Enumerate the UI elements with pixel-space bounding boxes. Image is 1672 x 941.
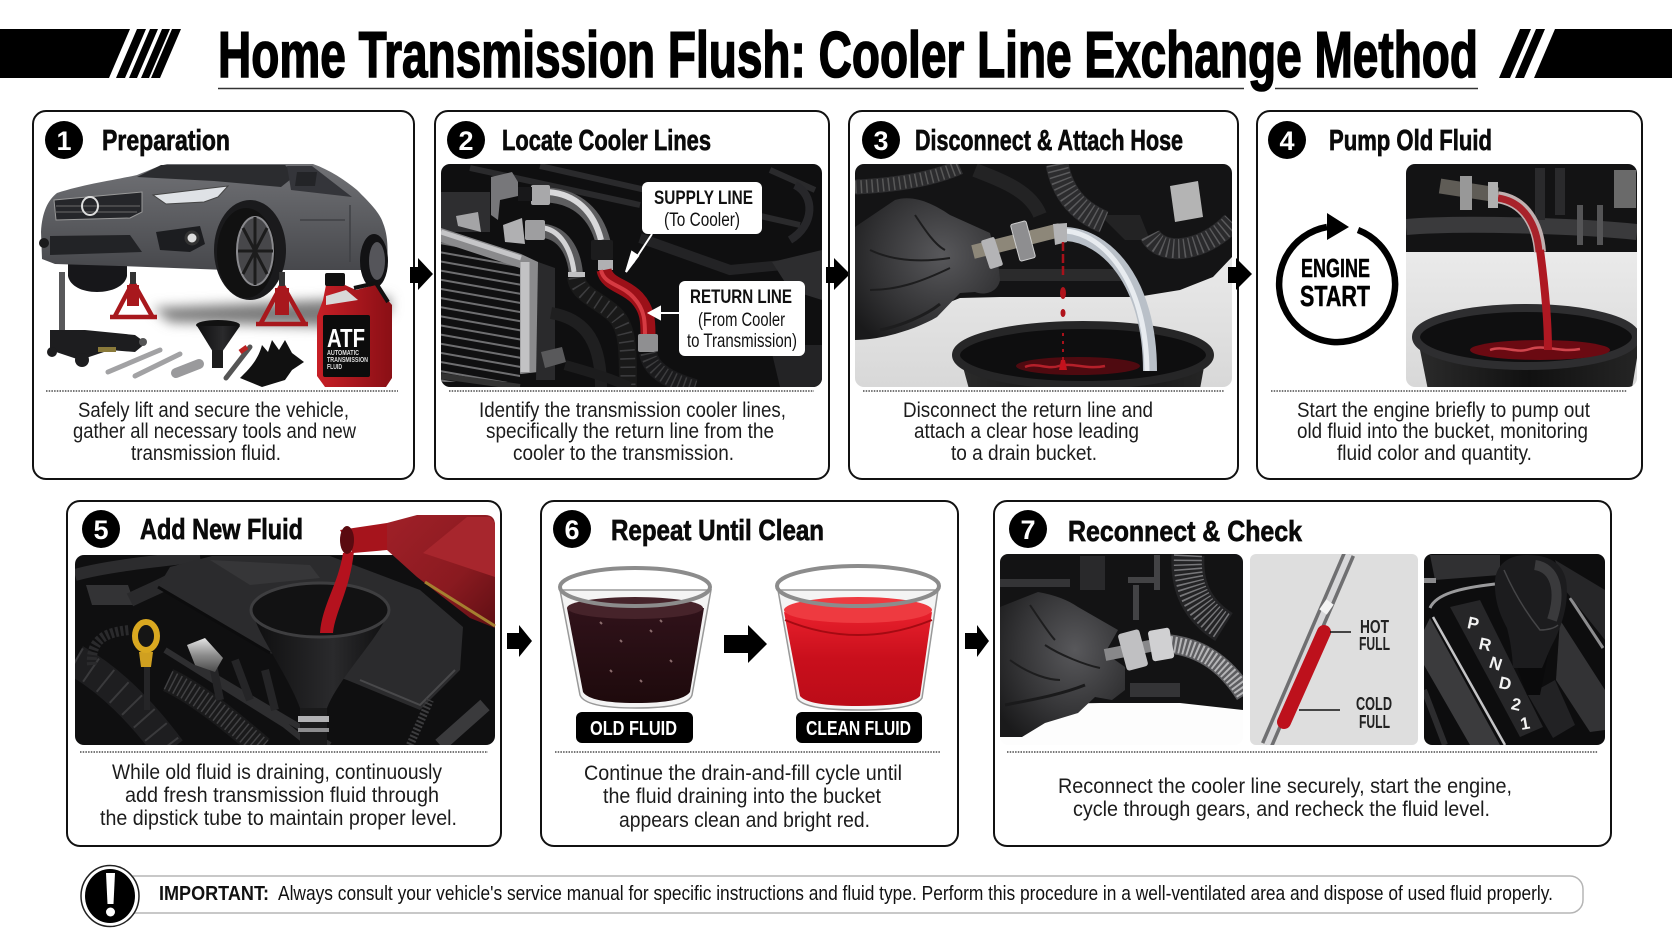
description: Reconnect the cooler line securely, start the engine, [1058, 775, 1512, 798]
left stripes [116, 29, 181, 78]
cold full mark [1299, 694, 1392, 732]
ATF jug: FLUID [327, 362, 342, 371]
fitting and clamps [973, 230, 1060, 252]
gear letters: 1 [1519, 713, 1531, 734]
description: Start the engine briefly to pump out [1297, 399, 1590, 422]
description [1297, 399, 1590, 465]
funnel [251, 583, 389, 745]
description: attach a clear hose leading [914, 420, 1139, 443]
bucket [964, 369, 1204, 387]
icon: engine start cycle arrow: START [1300, 281, 1370, 313]
step number 3 [862, 121, 900, 159]
gear letters: R [1477, 634, 1493, 655]
label: old fluid: OLD FLUID [590, 718, 677, 740]
step number 7: 7 [1020, 515, 1036, 545]
step number 2 [447, 121, 485, 159]
description: Identify the transmission cooler lines, [479, 399, 786, 422]
valve cover [158, 556, 463, 710]
supply hose collar [591, 240, 613, 260]
right stripes [1499, 29, 1545, 78]
panel: step 7 reconnect and check [994, 501, 1611, 846]
step number 7 [1009, 510, 1047, 548]
step number 1: 1 [56, 126, 72, 156]
ATF jug: ATF [327, 323, 365, 353]
description: gather all necessary tools and new [73, 420, 357, 443]
step number 5 [82, 510, 120, 548]
callout: supply line: SUPPLY LINE [654, 188, 753, 209]
bucket [1420, 346, 1637, 387]
cold full mark: FULL [1359, 712, 1390, 732]
heading: Preparation [102, 125, 230, 157]
label: clean fluid: CLEAN FLUID [806, 718, 911, 740]
panel: step 4 pump old fluid [1257, 111, 1642, 479]
description [903, 399, 1153, 465]
photo: gear selector [1424, 554, 1605, 745]
arrow 1 to 2 [410, 258, 433, 290]
silver supply pipe [548, 195, 603, 242]
photo: pouring fluid through funnel into engine [75, 515, 495, 750]
ATF jug [317, 273, 392, 387]
jack stands [110, 282, 308, 324]
silver sensor [187, 638, 223, 672]
arrow: return line pointer [649, 307, 679, 319]
red drips [1062, 242, 1064, 275]
description: transmission fluid. [131, 442, 281, 465]
icon: engine start cycle arrow [1279, 213, 1395, 342]
hot full mark [1330, 617, 1390, 654]
right black bar [1534, 29, 1672, 78]
step number 2: 2 [458, 126, 474, 156]
callout: supply line [642, 182, 762, 234]
description [73, 399, 357, 465]
glove [855, 198, 1000, 340]
arrow: old to clean [724, 625, 767, 663]
photo: gloved hand attaching clear hose over bucket [855, 164, 1232, 400]
left black bar [0, 29, 130, 78]
ATF jug: AUTOMATIC [327, 348, 359, 357]
illustration: cup of old fluid [560, 568, 711, 708]
description: the fluid draining into the bucket [603, 785, 881, 808]
icon: engine start cycle arrow: ENGINE [1301, 253, 1370, 283]
silver lower pipe [544, 231, 576, 274]
step number 6 [553, 510, 591, 548]
callout: return line: to Transmission) [687, 331, 797, 352]
bottle [340, 515, 495, 628]
title banner [0, 18, 1672, 91]
heading: Reconnect & Check [1068, 516, 1303, 548]
hot full mark: FULL [1359, 634, 1390, 654]
hoses [75, 660, 170, 750]
step number 1 [45, 121, 83, 159]
illustration: car on jack stands with tools and ATF jug [39, 164, 392, 387]
label: clean fluid [796, 712, 922, 743]
shift knob [1528, 688, 1542, 695]
fitting [1440, 186, 1498, 195]
description: to a drain bucket. [951, 442, 1097, 465]
panel: step 5 add new fluid [67, 501, 501, 846]
ATF jug: TRANSMISSION [327, 355, 368, 364]
photo: engine bay with cooler lines and radiator [441, 164, 822, 388]
wrenches and socket [108, 350, 199, 376]
panel: step 6 repeat until clean [541, 501, 958, 846]
photo: dipstick with hot and cold full marks [1250, 554, 1418, 745]
arrow: supply line pointer [626, 234, 652, 272]
description [584, 762, 902, 832]
arrow 3 to 4 [1228, 258, 1252, 290]
clear hose [1066, 234, 1150, 371]
hot full mark: HOT [1360, 617, 1389, 637]
floor jack [47, 272, 147, 367]
heading: Pump Old Fluid [1329, 125, 1492, 157]
heading: Add New Fluid [140, 514, 303, 546]
gear letters [1466, 613, 1531, 734]
description [100, 761, 457, 830]
hand [1000, 592, 1125, 737]
red return line [604, 270, 648, 336]
dipstick [144, 667, 150, 701]
gloves [240, 340, 304, 387]
photo: fluid pumping into bucket [1406, 164, 1640, 400]
gear letters: D [1497, 673, 1513, 694]
description: Disconnect the return line and [903, 399, 1153, 422]
small funnel [196, 320, 240, 368]
title underline [218, 88, 1478, 90]
corrugated line and fitting [1170, 644, 1245, 695]
gear letters: N [1487, 653, 1504, 675]
callout: supply line: (To Cooler) [664, 210, 740, 231]
step number 6: 6 [564, 515, 580, 545]
description: fluid color and quantity. [1337, 442, 1532, 465]
step number 4: 4 [1279, 126, 1295, 156]
description: add fresh transmission fluid through [125, 784, 439, 807]
radiator [441, 228, 538, 374]
gear letters: P [1466, 613, 1481, 634]
panel: step 1 preparation [33, 111, 414, 479]
arrow 2 to 3 [826, 258, 850, 290]
description: cycle through gears, and recheck the fluid level. [1073, 798, 1490, 821]
black lower hoses [576, 277, 628, 387]
heading: Repeat Until Clean [611, 515, 824, 547]
callout: return line: RETURN LINE [690, 287, 792, 308]
gear letters: 2 [1510, 694, 1523, 715]
description: appears clean and bright red. [619, 809, 870, 832]
callout: return line [679, 281, 805, 356]
description: the dipstick tube to maintain proper level. [100, 807, 457, 830]
shift gate strip [1450, 600, 1543, 737]
panel: step 3 disconnect and attach hose [849, 111, 1238, 479]
photo: reconnecting cooler line by hand [1000, 554, 1245, 745]
arrow 5 to 6 [507, 625, 532, 657]
callout: important safety note [81, 866, 1583, 926]
brackets [491, 172, 518, 220]
step number 5: 5 [93, 515, 109, 545]
note text: IMPORTANT: [159, 883, 269, 905]
heading: Locate Cooler Lines [502, 125, 711, 157]
label: old fluid [576, 712, 693, 743]
panel: step 2 locate cooler lines [435, 111, 829, 479]
cold full mark: COLD [1356, 694, 1392, 714]
right slots [1556, 620, 1605, 732]
icon: exclamation mark [81, 866, 139, 926]
step number 4 [1268, 121, 1306, 159]
step number 3: 3 [873, 126, 889, 156]
description: specifically the return line from the [486, 420, 774, 443]
description [1058, 775, 1512, 821]
description: Safely lift and secure the vehicle, [78, 399, 349, 422]
callout: return line: (From Cooler [698, 310, 786, 331]
description: Continue the drain-and-fill cycle until [584, 762, 902, 785]
hose and stream [1496, 197, 1540, 252]
description: old fluid into the bucket, monitoring [1297, 420, 1588, 443]
illustration: cup of clean fluid [777, 566, 939, 710]
description: While old fluid is draining, continuously [112, 761, 442, 784]
fluid stream [320, 551, 354, 633]
description [479, 399, 786, 465]
heading: Disconnect & Attach Hose [915, 125, 1183, 157]
arrow 6 to 7 [965, 625, 989, 657]
description: cooler to the transmission. [513, 442, 734, 465]
